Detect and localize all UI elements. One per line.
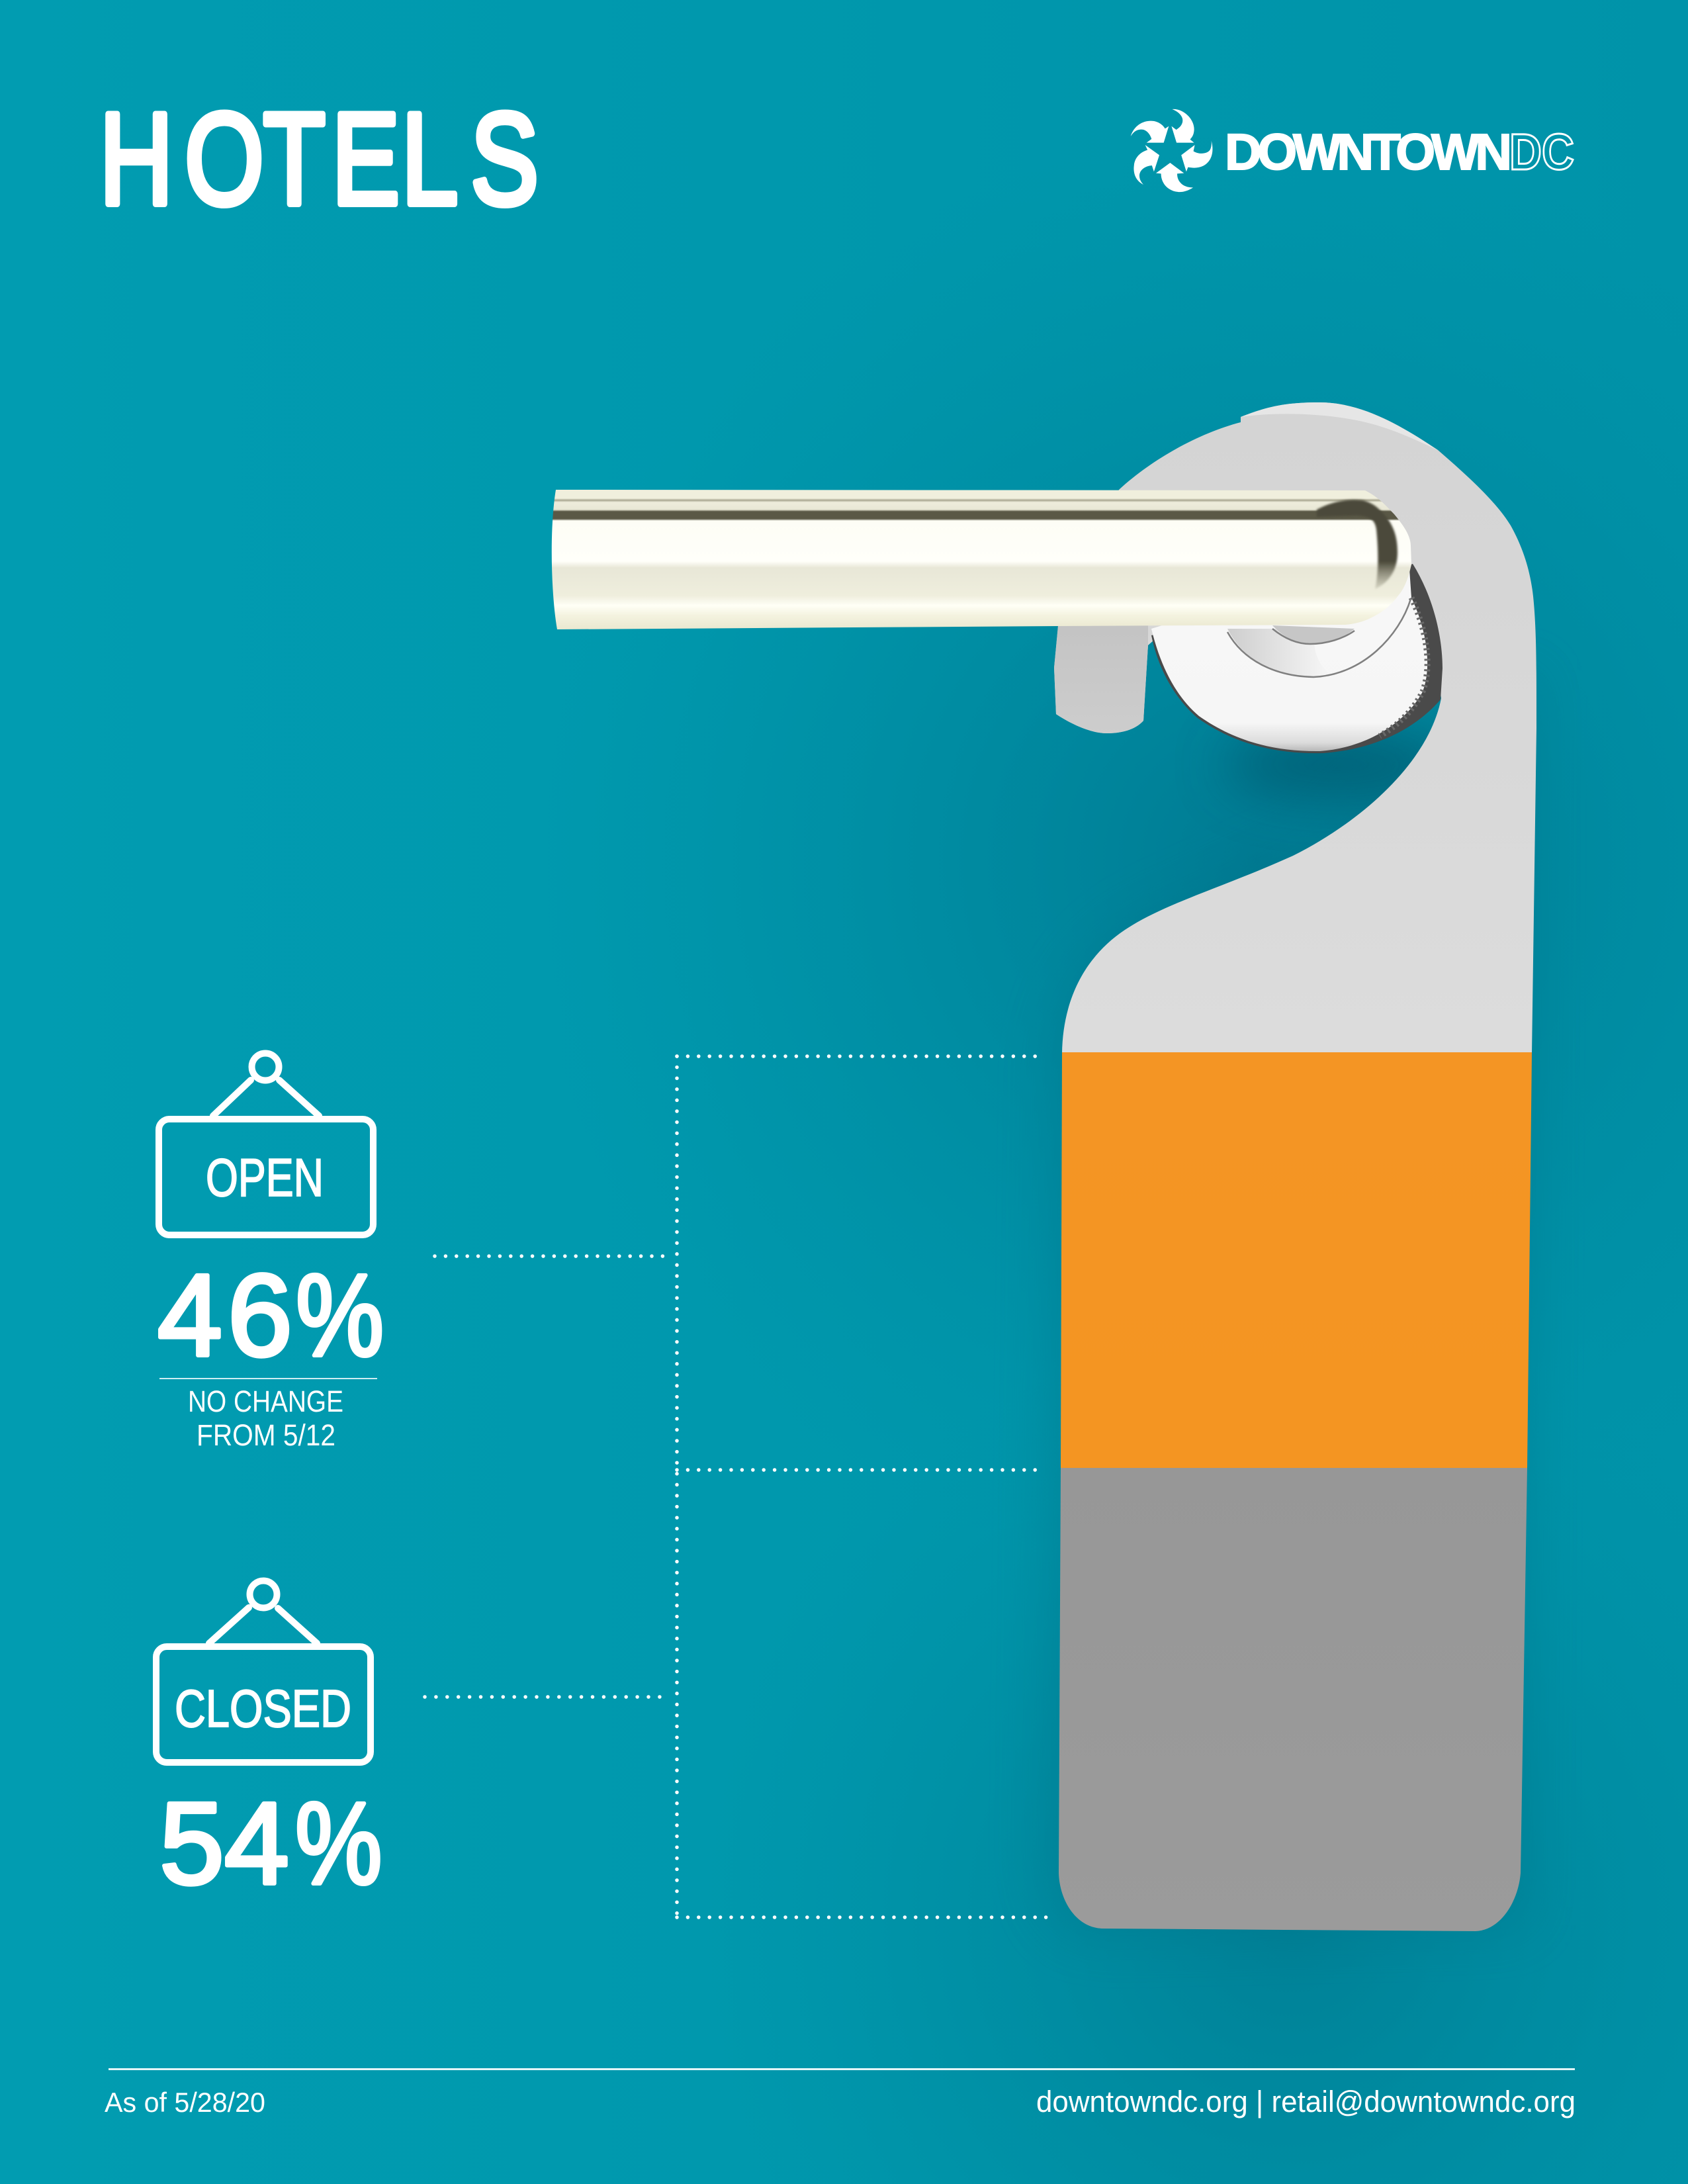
handle rosette plate (1151, 569, 1427, 751)
closed stat block (156, 1580, 382, 1909)
band: open (1061, 1052, 1532, 1468)
handle rosette rim (1151, 564, 1443, 753)
rosette serrated edge (1380, 598, 1427, 736)
logo: Downtown DC (1131, 109, 1574, 192)
contact: downtowndc.org | retail@downtowndc.org (1036, 2085, 1576, 2118)
logo wordmark: DOWNTOWN (1225, 124, 1512, 181)
band: closed (1059, 1468, 1527, 1931)
shadow of door hanger (1043, 667, 1533, 1934)
logo DC outline: DC (1509, 124, 1574, 181)
hanger top highlight (1241, 402, 1438, 450)
handle lever (552, 490, 1411, 629)
open change note: NO CHANGE (188, 1385, 343, 1418)
closed percent sign: % (295, 1779, 382, 1909)
icon: closed sign (156, 1580, 371, 1762)
open change date: FROM 5/12 (197, 1418, 335, 1452)
rosette inner plate shading (1227, 629, 1330, 677)
closed percentage digits: 54 (159, 1779, 289, 1909)
open label: OPEN (206, 1148, 324, 1208)
handle rosette shadow (1224, 731, 1449, 797)
open divider (159, 1378, 377, 1379)
icon: open sign (159, 1054, 373, 1235)
dotted connectors (425, 1056, 1047, 1917)
title: HOTELS (100, 87, 539, 232)
open stat block (157, 1054, 384, 1452)
hanger top section (1054, 402, 1536, 1054)
hanger hook (1054, 625, 1148, 733)
rosette spindle base (1272, 625, 1355, 644)
footer rule (109, 2068, 1575, 2070)
icon: star with swirling arrows (1131, 109, 1212, 192)
lever end shading (1317, 500, 1398, 589)
rosette rings (1227, 599, 1411, 677)
door handle (552, 490, 1443, 753)
open percentage digits: 46 (157, 1251, 292, 1381)
closed label: CLOSED (175, 1679, 351, 1738)
as-of date: As of 5/28/20 (105, 2087, 265, 2118)
open percent sign: % (296, 1250, 384, 1381)
door hanger (1054, 402, 1536, 1931)
footer (105, 2068, 1576, 2118)
